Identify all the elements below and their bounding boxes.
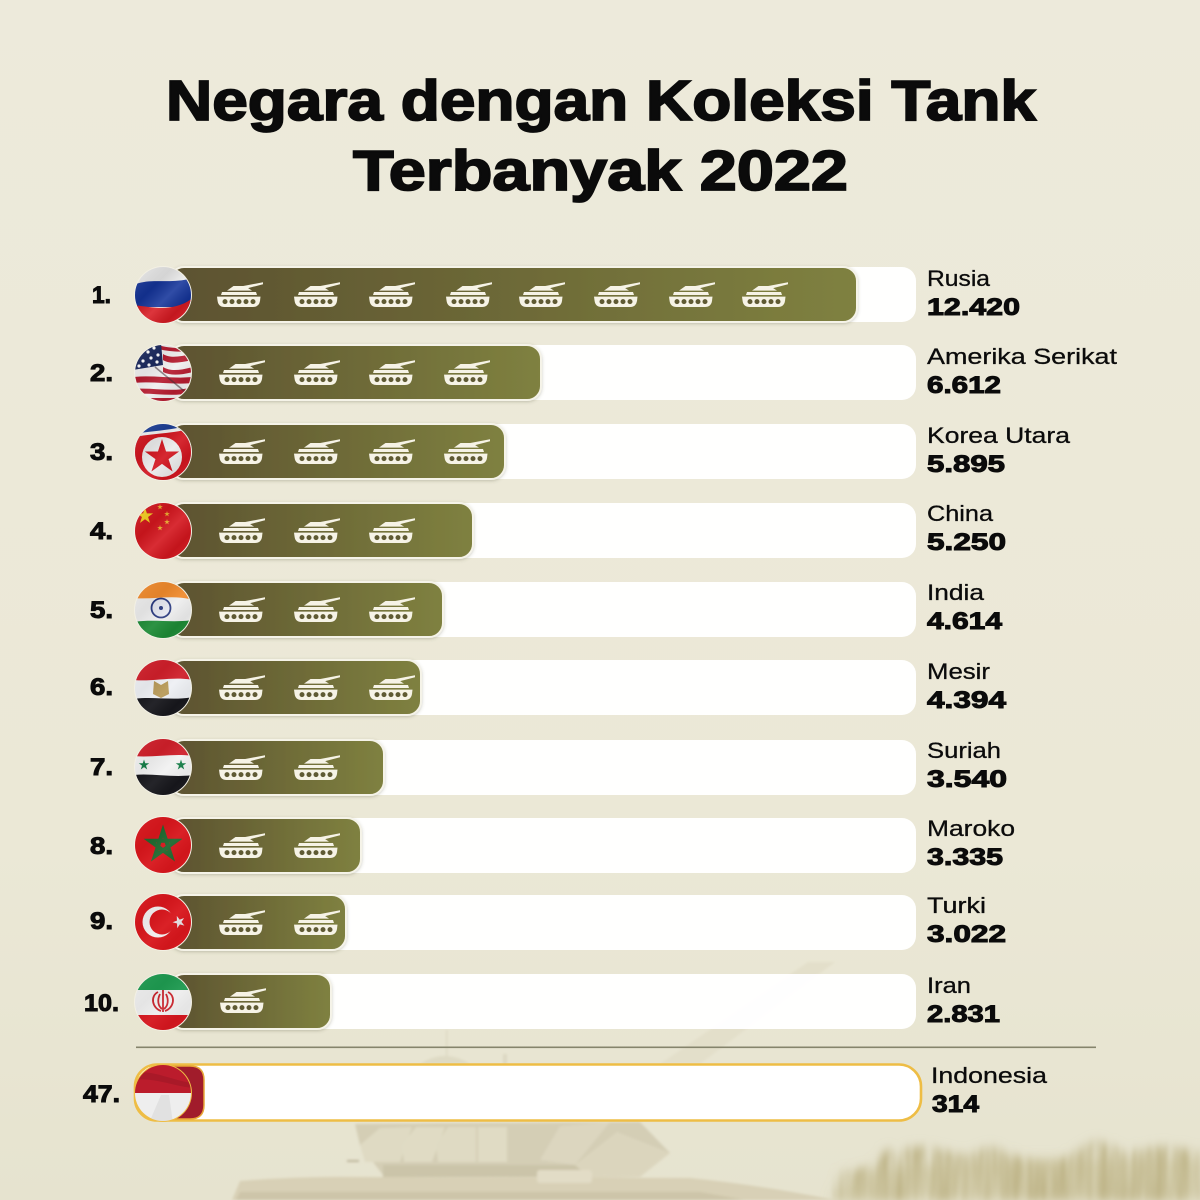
title: Negara dengan Koleksi Tank [166,69,1036,133]
row 4: China [90,501,1006,561]
flag: Iran [133,972,193,1032]
rank 6: 6. [90,674,113,701]
rank 3: 3. [90,439,113,466]
bar value 3.540 [170,740,384,795]
row 8: Maroko [90,815,1015,875]
track [170,503,916,558]
row 6: Mesir [90,658,1007,718]
value: 5.250 [927,529,1006,556]
bar value 5.895 [170,424,505,479]
rank 10: 10. [84,990,119,1017]
tank icons [220,988,266,1013]
rank 4: 4. [90,518,113,545]
row 7: Suriah [90,737,1007,797]
row 9: Turki [90,892,1006,952]
bar value 6.612 [170,345,541,400]
flag: USA [133,343,193,403]
tank icons [219,360,490,385]
flag: Turkey [133,892,193,952]
track [170,895,916,950]
rank 1: 1. [92,282,111,309]
value: 4.614 [927,608,1003,635]
bar value 12.420 [170,267,857,322]
track [170,345,916,400]
value: 12.420 [927,294,1020,321]
tank icons [217,282,788,307]
label: Suriah [927,738,1001,763]
label: India [927,580,985,605]
track [170,424,916,479]
flag: India [133,580,193,640]
title [166,69,1036,203]
background photo: hazy tank and grass [232,962,1200,1200]
label: Korea Utara [927,423,1071,448]
tank icons [219,518,415,543]
grass haze [835,1158,1200,1200]
bar value 2.831 [170,974,331,1029]
flag: Syria [133,737,193,797]
track [170,660,916,715]
value: 3.022 [927,921,1006,948]
tank icons [219,675,415,700]
label: China [927,501,994,526]
flag: Egypt [133,658,193,718]
flag: Russia [133,265,193,325]
row 10: Iran [84,972,1000,1032]
grass [830,1140,1200,1200]
value: 3.335 [927,844,1003,871]
row 1: Rusia [92,265,1020,325]
value: 5.895 [927,451,1005,478]
flag: Indonesia [133,1063,193,1123]
tank icons [219,597,415,622]
rank 47: 47. [83,1081,120,1108]
label: Rusia [927,266,991,291]
tank icons [219,910,340,935]
label: Iran [927,973,971,998]
tank icons [219,439,490,464]
row 3: Korea Utara [90,422,1071,482]
bar value 3.022 [170,895,346,950]
value: 6.612 [927,372,1001,399]
bar value 3.335 [170,818,361,873]
track [170,740,916,795]
label: Amerika Serikat [927,344,1117,369]
track [170,267,916,322]
rank 5: 5. [90,597,113,624]
label: Indonesia [931,1063,1048,1088]
row 2: Amerika Serikat [90,343,1117,403]
flag: China [133,501,193,561]
flag: North Korea [133,422,193,482]
value: 314 [932,1091,980,1118]
rank 9: 9. [90,908,113,935]
value: 4.394 [927,687,1007,714]
bar value 4.614 [170,582,443,637]
divider line [136,1046,1096,1048]
title: Terbanyak 2022 [353,139,848,203]
rank 2: 2. [90,360,113,387]
rank 8: 8. [90,833,113,860]
highlighted track [135,1064,921,1120]
tank icons [219,833,340,858]
rank 7: 7. [90,754,113,781]
track [170,582,916,637]
label: Mesir [927,659,990,684]
bar value 4.394 [170,660,421,715]
value: 2.831 [927,1001,1000,1028]
track [170,818,916,873]
label: Maroko [927,816,1015,841]
bar value 5.250 [170,503,473,558]
row 47: Indonesia [83,1063,1048,1123]
label: Turki [927,893,986,918]
flag: Morocco [133,815,193,875]
row 5: India [90,580,1003,640]
value: 3.540 [927,766,1007,793]
tank icons [219,755,340,780]
bar value 314 [163,1066,204,1119]
track [170,974,916,1029]
